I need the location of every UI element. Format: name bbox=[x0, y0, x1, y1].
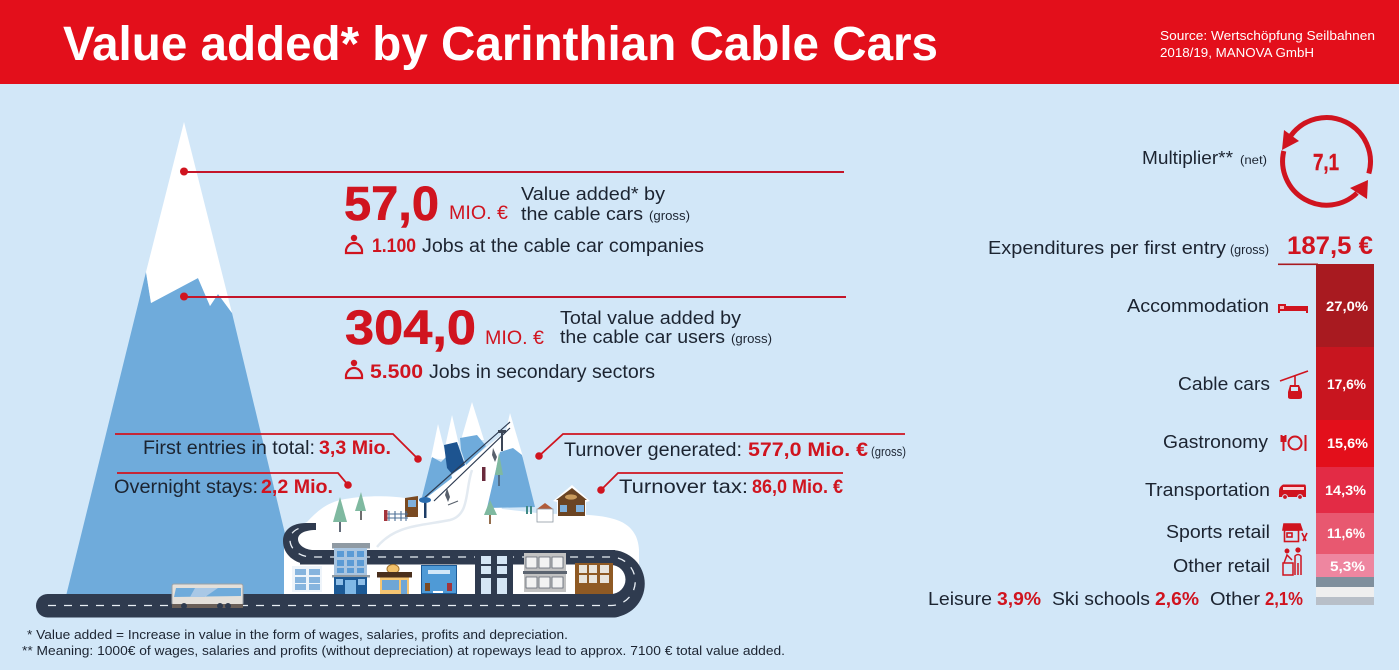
lift hut and fence bbox=[384, 496, 418, 521]
icon: gondola bbox=[1280, 371, 1308, 399]
large mountain illustration bbox=[66, 122, 300, 596]
callout: turnover tax bbox=[597, 473, 843, 498]
ski scene mountains bbox=[377, 402, 535, 547]
callout: value added by cable cars: (gross) bbox=[649, 208, 690, 223]
callout: overnight stays bbox=[114, 473, 352, 498]
brown house bbox=[574, 560, 614, 594]
bus bbox=[172, 584, 243, 609]
stacked bar chart: 14,3% bbox=[1325, 482, 1367, 498]
source note bbox=[1160, 28, 1375, 60]
multiplier bbox=[1142, 118, 1370, 205]
icon: person bbox=[346, 360, 362, 378]
chalet bbox=[553, 485, 590, 517]
category: cable cars: Cable cars bbox=[1178, 373, 1270, 394]
snowy hill bbox=[284, 496, 639, 596]
callout: turnover generated: (gross) bbox=[871, 444, 906, 459]
expenditures heading: (gross) bbox=[1230, 242, 1269, 257]
callout: value added by cable cars: the cable cars bbox=[521, 204, 643, 224]
small categories legend: 3,9% bbox=[997, 588, 1041, 609]
stacked bar chart: 27,0% bbox=[1326, 298, 1369, 314]
callout: total value added by users: 5.500 bbox=[370, 362, 423, 383]
window block bbox=[292, 566, 322, 592]
callout: value added by cable cars: Value added* by bbox=[521, 184, 665, 204]
stacked bar chart: 17,6% bbox=[1327, 376, 1367, 392]
callout: overnight stays: 2,2 Mio. bbox=[261, 477, 333, 498]
small categories legend: 2,1% bbox=[1265, 588, 1303, 609]
stacked bar chart bbox=[1316, 264, 1374, 605]
category: accommodation: Accommodation bbox=[1127, 295, 1269, 316]
category: sports retail: Sports retail bbox=[1166, 521, 1270, 542]
multiplier: (net) bbox=[1240, 155, 1267, 167]
footnotes: ** Meaning: 1000€ of wages, salaries and profits (without depreciation) at ropeways lead to approx. 7100 € total value added. bbox=[22, 643, 785, 658]
callout: total value added by users: Total value added by bbox=[560, 308, 741, 328]
category: transportation: Transportation bbox=[1145, 479, 1270, 500]
chair lift bbox=[419, 422, 510, 518]
callout: value added by cable cars: Jobs at the cable car companies bbox=[422, 236, 704, 257]
callout: turnover generated bbox=[535, 434, 906, 461]
callout: total value added by users: Jobs in secondary sectors bbox=[429, 362, 655, 383]
small categories legend: Leisure bbox=[928, 588, 992, 609]
source note: Source: Wertschöpfung Seilbahnen bbox=[1160, 28, 1375, 43]
callout: value added by cable cars: 57,0 bbox=[344, 178, 439, 231]
multiplier: Multiplier** bbox=[1142, 148, 1233, 168]
header banner bbox=[0, 0, 1399, 84]
stacked bar chart: 11,6% bbox=[1327, 525, 1366, 541]
callout: first entries: 3,3 Mio. bbox=[319, 438, 391, 459]
category: other retail bbox=[1173, 548, 1301, 576]
footnotes bbox=[22, 627, 785, 658]
grey townhouse bbox=[523, 553, 567, 592]
bakery bbox=[377, 564, 412, 594]
callout: turnover tax: 86,0 Mio. € bbox=[752, 477, 843, 498]
town buildings bbox=[292, 543, 614, 594]
source note: 2018/19, MANOVA GmbH bbox=[1160, 45, 1314, 60]
callout: turnover tax: Turnover tax: bbox=[619, 477, 748, 498]
callout: value added by cable cars: 1.100 bbox=[372, 236, 416, 257]
callout: total value added by users bbox=[180, 292, 846, 383]
callout: value added by cable cars: MIO. € bbox=[449, 203, 508, 224]
multiplier: 7,1 bbox=[1313, 149, 1339, 175]
icon: bed bbox=[1278, 304, 1308, 313]
icon: shop with skier bbox=[1283, 524, 1307, 542]
callout: total value added by users: (gross) bbox=[731, 331, 772, 346]
category: cable cars bbox=[1178, 371, 1308, 399]
icon: circular arrows bbox=[1282, 118, 1370, 205]
small categories legend bbox=[928, 588, 1303, 609]
callout: first entries bbox=[115, 434, 422, 463]
small categories legend: Ski schools bbox=[1052, 588, 1150, 609]
expenditures heading: 187,5 € bbox=[1287, 232, 1373, 260]
slope path bbox=[377, 470, 472, 547]
callout: turnover generated: 577,0 Mio. € bbox=[748, 440, 868, 461]
small categories legend: Other bbox=[1210, 588, 1260, 609]
trees bbox=[333, 453, 532, 532]
stacked bar chart: 15,6% bbox=[1327, 435, 1369, 451]
category: other retail: Other retail bbox=[1173, 555, 1270, 576]
callout: value added by cable cars bbox=[180, 168, 844, 257]
icon: shoppers bbox=[1283, 548, 1301, 575]
callout: total value added by users: 304,0 bbox=[345, 302, 476, 355]
terrace table bbox=[537, 503, 553, 522]
icon: plate and cutlery bbox=[1282, 435, 1306, 451]
category: gastronomy: Gastronomy bbox=[1163, 431, 1269, 452]
expenditures heading: Expenditures per first entry bbox=[988, 238, 1226, 258]
road bbox=[36, 523, 645, 618]
icon: person bbox=[346, 235, 362, 253]
callout: total value added by users: the cable car users bbox=[560, 327, 725, 347]
title: Value added* by Carinthian Cable Cars bbox=[63, 18, 938, 71]
icon: bus bbox=[1279, 484, 1306, 499]
stacked bar chart: 5,3% bbox=[1330, 558, 1366, 574]
small categories legend: 2,6% bbox=[1155, 588, 1199, 609]
callout: turnover generated: Turnover generated: bbox=[564, 440, 742, 461]
callout: overnight stays: Overnight stays: bbox=[114, 477, 258, 498]
dark tower block bbox=[475, 550, 513, 594]
expenditures heading bbox=[988, 232, 1373, 265]
callout: first entries: First entries in total: bbox=[143, 438, 315, 459]
callout: total value added by users: MIO. € bbox=[485, 328, 544, 349]
skier bbox=[482, 467, 486, 481]
hotel bbox=[332, 543, 370, 594]
footnotes: * Value added = Increase in value in the form of wages, salaries, profits and depreciation. bbox=[27, 627, 568, 642]
sports shop bbox=[421, 565, 457, 594]
